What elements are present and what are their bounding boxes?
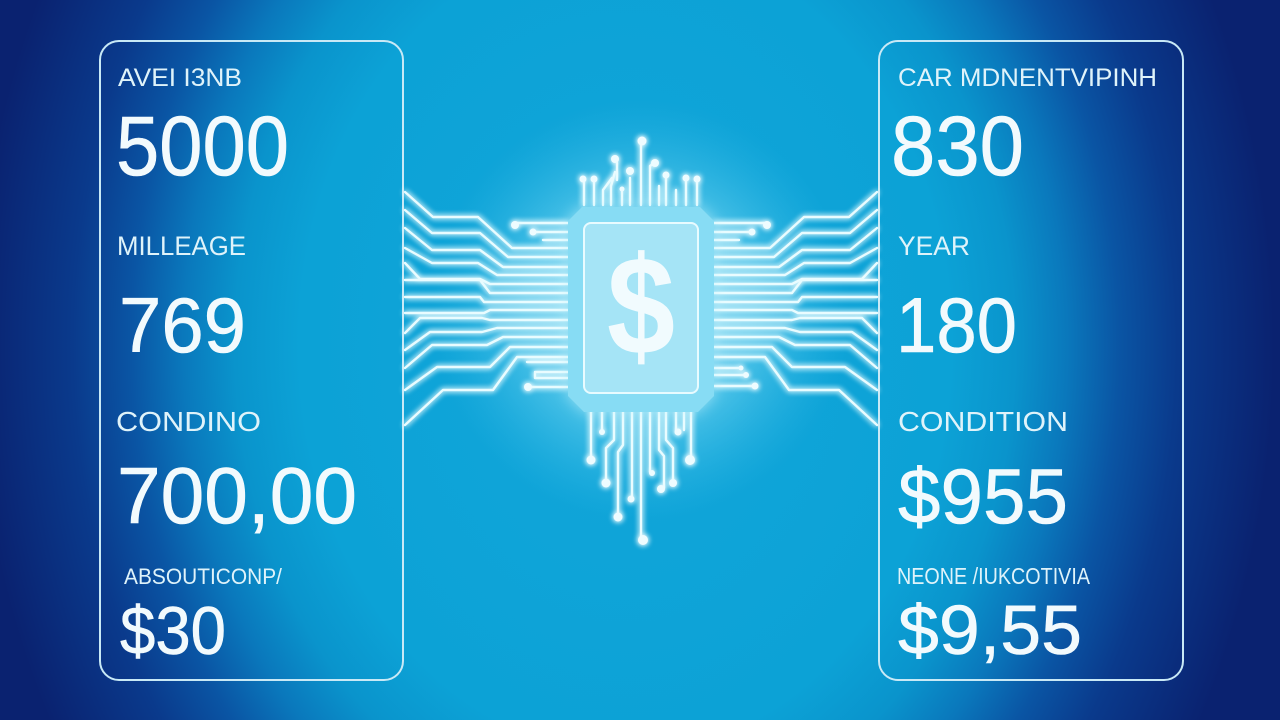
label: neone: NEONE /IUKCOTIVIA [897, 563, 1091, 589]
chip body [568, 207, 714, 412]
label: car: CAR MDNENTVIPINH [898, 64, 1157, 92]
label: condition: CONDITION [898, 406, 1068, 437]
label: condition: CONDINO [116, 406, 261, 437]
right panel border [879, 41, 1183, 680]
chip glow [568, 207, 714, 412]
icon: dollar chip [568, 207, 714, 412]
panel: left stats [100, 41, 403, 680]
circuit traces: left [405, 192, 568, 425]
value: 769: 769 [119, 281, 246, 369]
circuit traces: bottom [586, 408, 695, 545]
left panel border [100, 41, 403, 680]
chip inner panel [584, 223, 698, 393]
label: year: YEAR [898, 231, 970, 261]
central glow [431, 100, 851, 520]
label: average: AVEI I3NB [118, 64, 242, 92]
dollar sign: $ [607, 227, 675, 384]
label: mileage: MILLEAGE [117, 231, 246, 261]
value: 5000: 5000 [116, 99, 289, 193]
value: 700,00: 700,00 [117, 451, 357, 540]
value: $30: $30 [120, 593, 226, 669]
value: $955: $955 [898, 452, 1068, 540]
circuit traces: right [714, 192, 877, 425]
value: 180: 180 [896, 281, 1017, 369]
circuit traces: top [580, 136, 700, 205]
label: absolute: ABSOUTICONP/ [124, 564, 283, 589]
panel: right stats [879, 41, 1183, 680]
value: $9,55: $9,55 [898, 591, 1082, 669]
value: 830: 830 [891, 99, 1024, 193]
